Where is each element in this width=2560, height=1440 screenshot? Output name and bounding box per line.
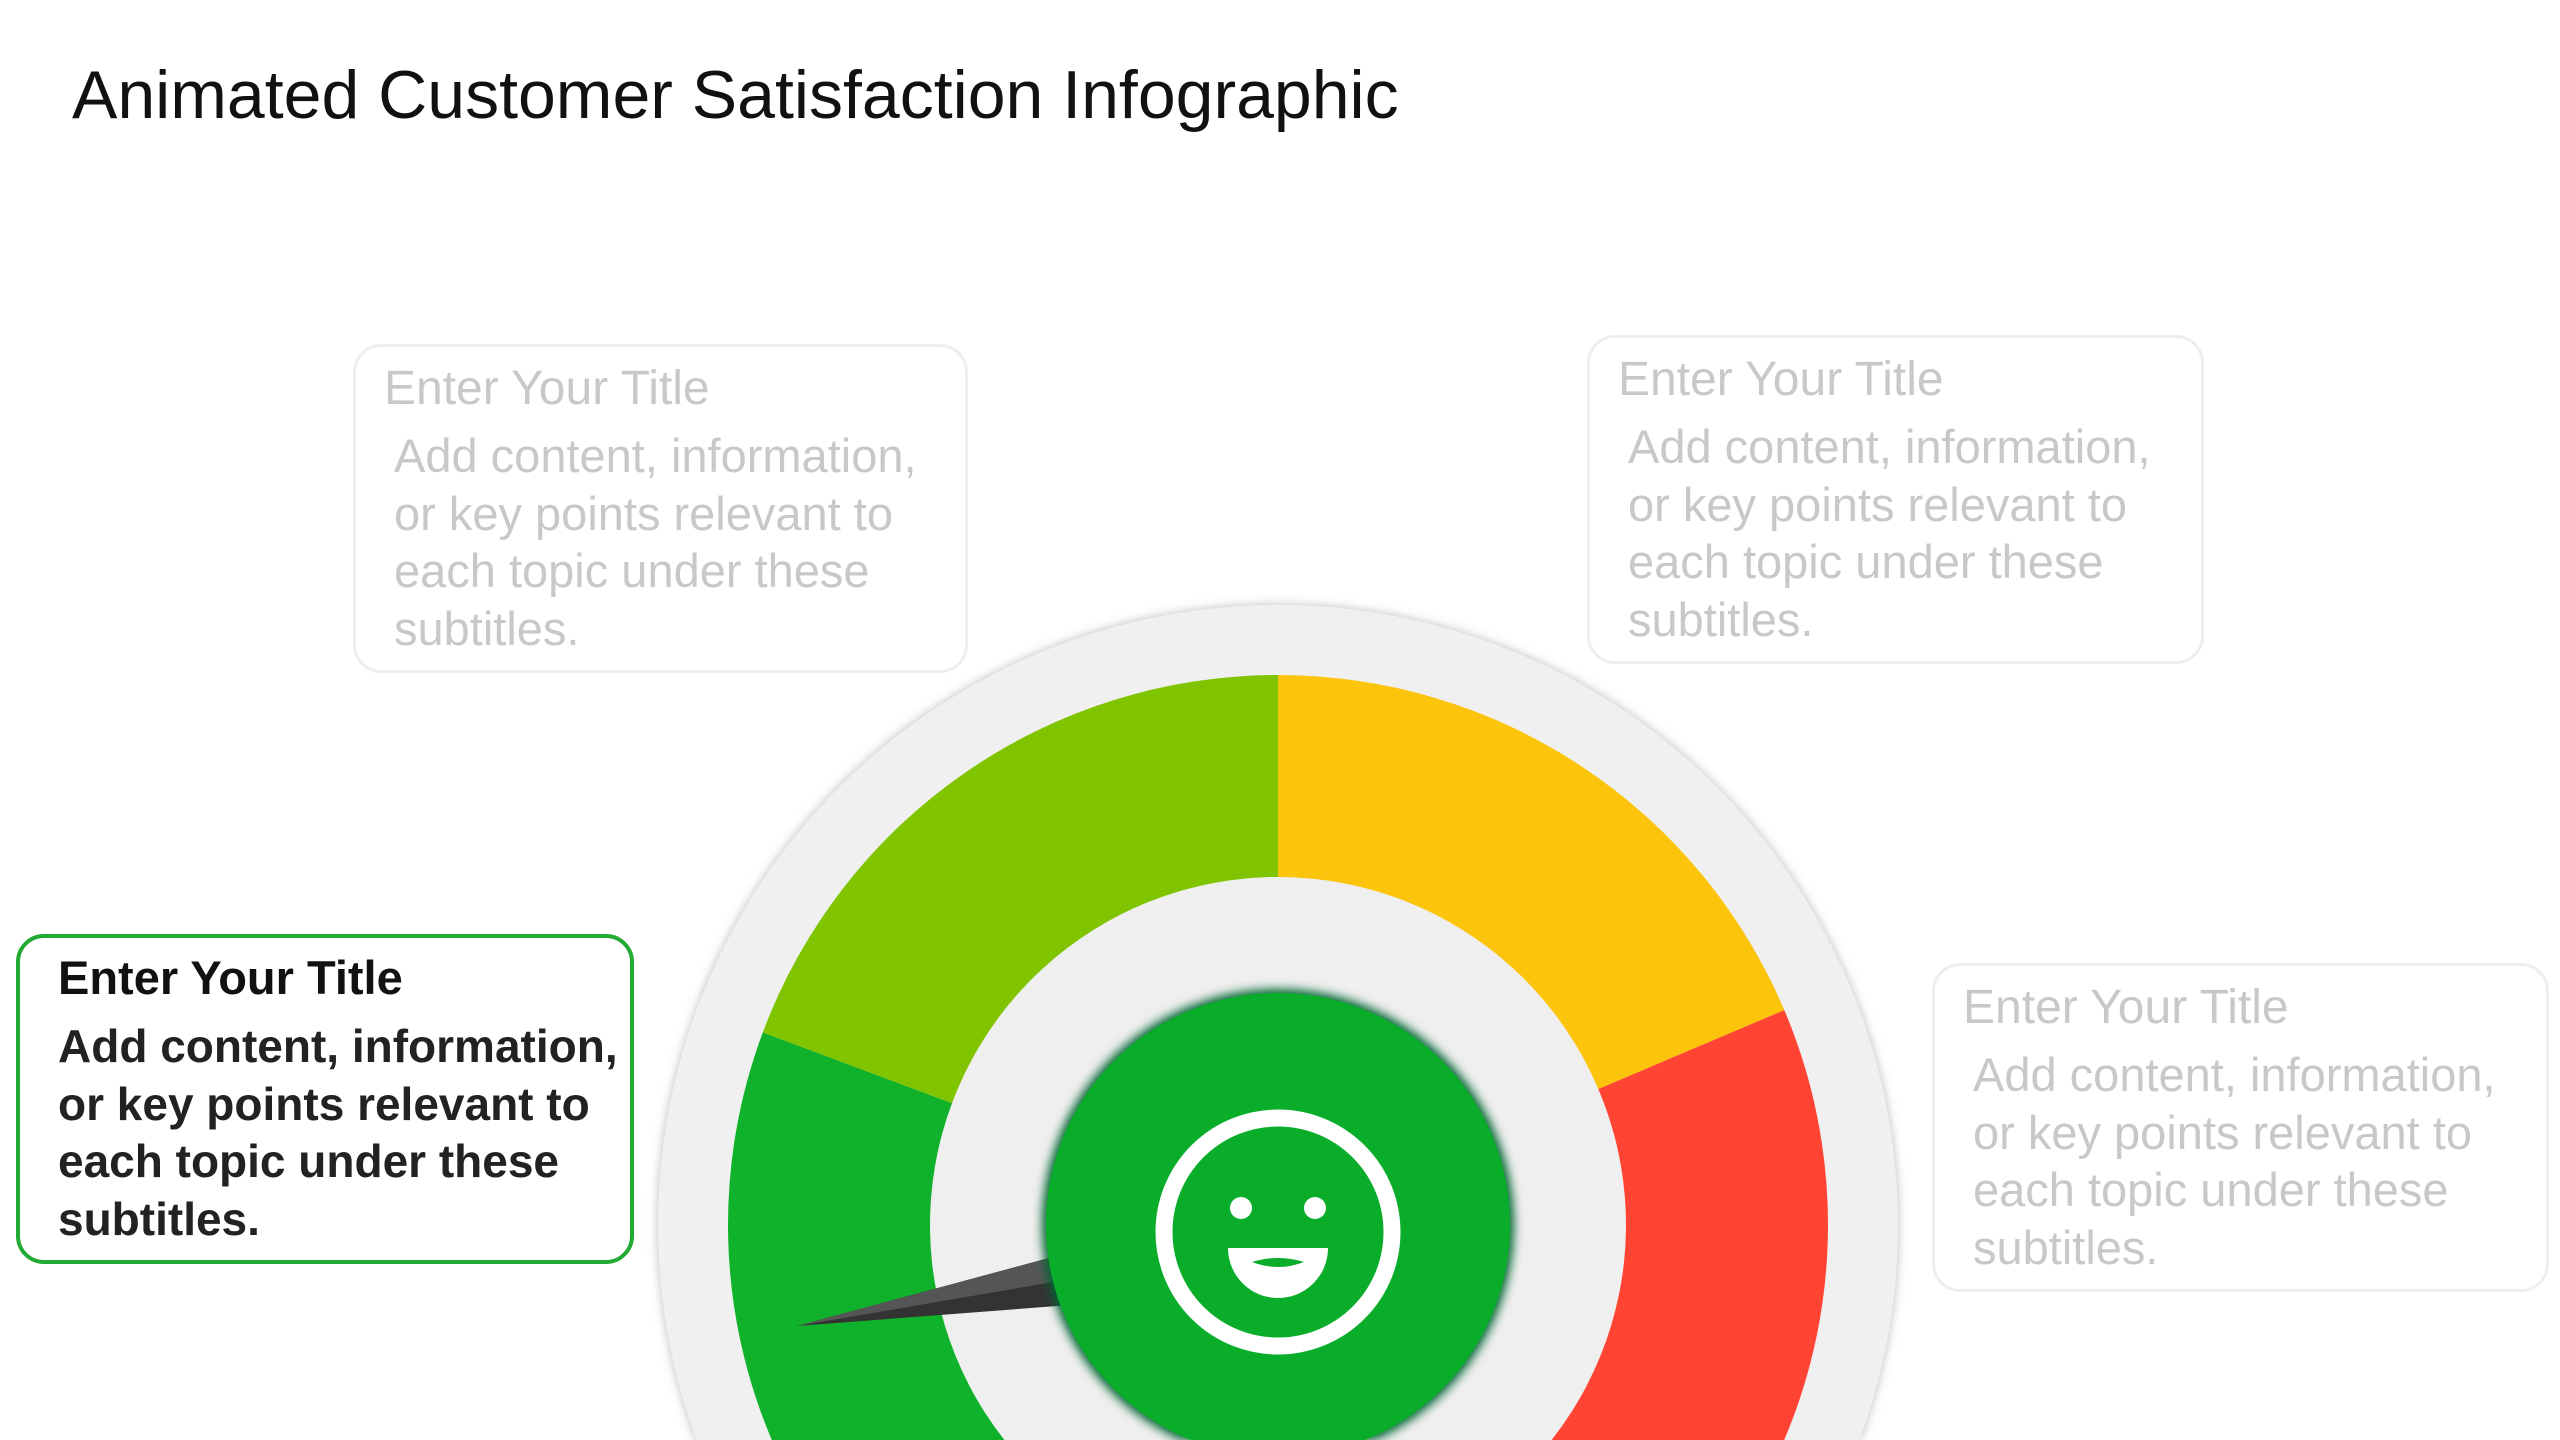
- text block: subtitles.: [394, 602, 579, 654]
- text block: or key points relevant to: [1628, 478, 2127, 530]
- text block: Add content, information,: [58, 1020, 618, 1072]
- panel: top left: [353, 344, 968, 673]
- gauge outer disk: [658, 605, 1898, 1440]
- needle: [797, 1255, 1070, 1326]
- text block: [1628, 420, 2151, 646]
- text block: Add content, information,: [1628, 420, 2151, 473]
- gauge inner disk: [930, 877, 1626, 1440]
- icon: smiley face: [1164, 1118, 1392, 1346]
- text block: Add content, information,: [394, 429, 917, 482]
- text block: [394, 429, 917, 654]
- title: Animated Customer Satisfaction Infographic: [72, 57, 1399, 133]
- text block: or key points relevant to: [1973, 1106, 2472, 1158]
- panel: active left: [16, 934, 634, 1264]
- heading: Enter Your Title: [58, 951, 403, 1004]
- center green disk: [1042, 989, 1514, 1440]
- text block: subtitles.: [1973, 1220, 2158, 1274]
- text block: each topic under these: [58, 1135, 559, 1187]
- text block: each topic under these: [1973, 1163, 2449, 1216]
- gauge colored ring: [728, 675, 1828, 1440]
- text block: [58, 1020, 618, 1244]
- text block: Add content, information,: [1973, 1048, 2496, 1101]
- text block: each topic under these: [394, 544, 870, 597]
- text block: or key points relevant to: [394, 486, 893, 540]
- panel: top right: [1587, 335, 2204, 664]
- text block: subtitles.: [58, 1192, 260, 1244]
- panel: bottom right: [1932, 963, 2549, 1292]
- text block: [1973, 1048, 2496, 1274]
- text block: each topic under these: [1628, 535, 2104, 588]
- text block: subtitles.: [1628, 592, 1813, 646]
- heading: Enter Your Title: [384, 362, 710, 415]
- heading: Enter Your Title: [1963, 981, 2289, 1034]
- text block: or key points relevant to: [58, 1078, 590, 1130]
- heading: Enter Your Title: [1618, 353, 1944, 406]
